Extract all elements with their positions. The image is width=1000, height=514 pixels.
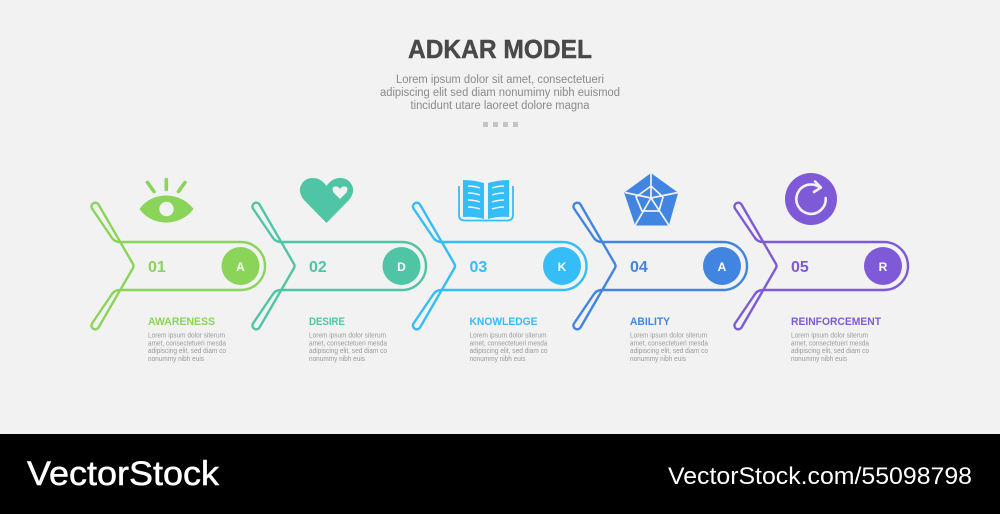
description 3: Lorem ipsum dolor siterum [470,332,547,340]
description 4: amet, consectetueri mesda [630,340,708,348]
description 2 [309,332,387,363]
subtitle text [380,74,620,112]
label reinforcement: REINFORCEMENT [791,316,881,328]
description 3: amet, consectetueri mesda [470,340,548,348]
badge K [543,247,581,285]
step 5: reinforcement [734,173,908,363]
icon: radar pentagon [625,173,678,226]
number 05: 05 [791,259,809,276]
badge A [703,247,741,285]
description 4 [630,332,708,363]
description 2: Lorem ipsum dolor siterum [309,332,386,340]
icon: heart [300,178,353,223]
arrow outline 2 [252,203,426,329]
badge A [222,247,260,285]
description 3: nonummy nibh euis [470,356,526,363]
description 2: amet, consectetueri mesda [309,340,387,348]
subtitle text: tincidunt utare laoreet dolore magna [410,100,590,112]
title: ADKAR MODEL [408,36,592,64]
badge D [382,247,420,285]
arrow outline 3 [413,203,586,329]
badge R [864,247,902,285]
number 02: 02 [309,259,327,276]
step 4: ability: A [718,260,727,274]
description 1: adipiscing elit, sed diam co [148,348,226,355]
label awareness: AWARENESS [148,316,215,328]
description 2: nonummy nibh euis [309,356,365,363]
description 4: Lorem ipsum dolor siterum [630,332,707,340]
pagination dots [483,122,518,127]
label knowledge: KNOWLEDGE [470,316,538,328]
number 03: 03 [470,259,487,276]
arrow outline 1 [91,203,265,329]
label desire: DESIRE [309,316,345,328]
description 5: nonummy nibh euis [791,356,847,363]
footer url: VectorStock.com/55098798 [668,463,972,490]
step 3: knowledge: K [558,260,567,274]
description 2: adipiscing elit, sed diam co [309,348,387,355]
footer logo: VectorStock [27,455,220,493]
step 2: desire [252,178,426,363]
description 1: nonummy nibh euis [148,356,204,363]
subtitle text: adipiscing elit sed diam nonumimy nibh euismod [380,87,620,99]
description 5: amet, consectetueri mesda [791,340,869,348]
step 5: reinforcement: R [879,260,888,274]
description 5: adipiscing elit, sed diam co [791,348,869,355]
number 01: 01 [148,259,166,276]
icon: refresh circle [785,173,837,225]
description 3 [470,332,548,363]
number 04: 04 [630,259,648,276]
icon: eye [140,180,194,222]
label ability: ABILITY [630,316,671,328]
arrow outline 5 [734,203,908,329]
description 4: nonummy nibh euis [630,356,686,363]
description 1: Lorem ipsum dolor siterum [148,332,225,340]
step 1: awareness [91,180,265,363]
description 1: amet, consectetueri mesda [148,340,226,348]
description 4: adipiscing elit, sed diam co [630,348,708,355]
description 1 [148,332,226,363]
arrow outline 4 [573,203,747,329]
step 3: knowledge [413,180,586,363]
icon: open book [459,180,513,220]
step 4: ability [573,173,747,363]
footer bar [0,434,1000,514]
description 5: Lorem ipsum dolor siterum [791,332,868,340]
description 5 [791,332,869,363]
subtitle text: Lorem ipsum dolor sit amet, consectetueri [396,74,604,86]
step 2: desire: D [397,260,406,274]
description 3: adipiscing elit, sed diam co [470,348,548,355]
step 1: awareness: A [236,260,245,274]
